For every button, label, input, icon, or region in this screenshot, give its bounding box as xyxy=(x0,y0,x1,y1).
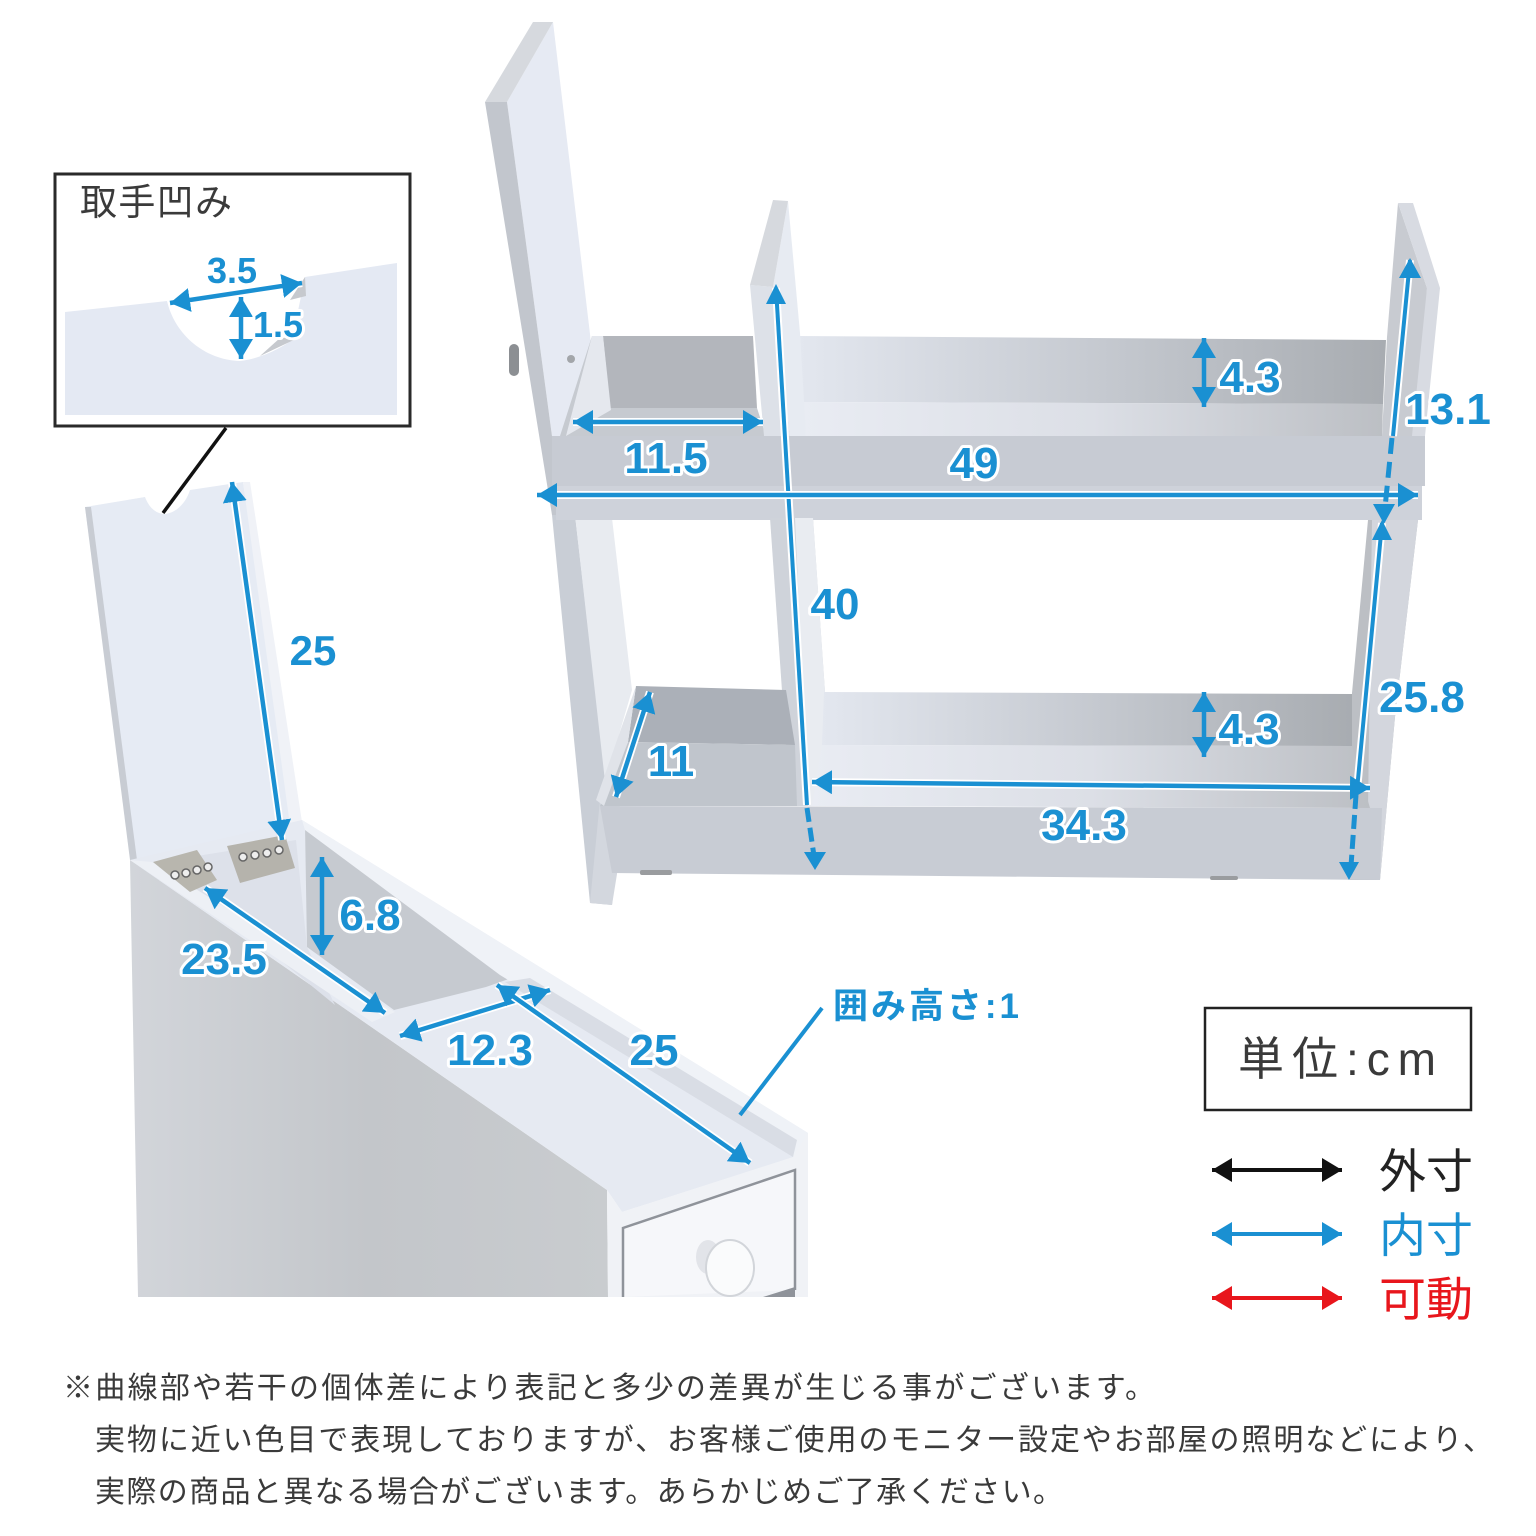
footnote: ※曲線部や若干の個体差により表記と多少の差異が生じる事がございます。 xyxy=(63,1372,1155,1405)
dimension top 25 xyxy=(497,985,750,1163)
dimension lower 4.3: 4.3 xyxy=(1218,705,1280,754)
panel: cabinet with open lid xyxy=(85,428,1019,1297)
footnote: 実物に近い色目で表現しておりますが、お客様ご使用のモニター設定やお部屋の照明などにより、 xyxy=(95,1424,1493,1457)
lid notch shape xyxy=(65,263,397,415)
back board xyxy=(485,22,632,905)
dimension upper 4.3 xyxy=(1204,338,1281,407)
dimension 25.8 xyxy=(1339,520,1465,880)
upper shelf xyxy=(552,336,1425,520)
lid xyxy=(85,482,305,880)
legend: outer size: 外寸 xyxy=(1379,1145,1473,1198)
casters xyxy=(640,870,1238,880)
leader from inset to notch xyxy=(163,428,226,513)
cabinet front with drawer xyxy=(607,1133,808,1297)
dimension upper 4.3: 4.3 xyxy=(1219,353,1281,402)
dimension 3.5 xyxy=(170,250,302,303)
hinges xyxy=(153,835,295,892)
dimension lower 4.3 xyxy=(1204,692,1280,757)
legend xyxy=(1212,1145,1473,1326)
dimension 11: 11 xyxy=(648,737,694,786)
dimension 49: 49 xyxy=(950,439,998,488)
screw xyxy=(567,355,575,363)
inset frame xyxy=(55,174,410,426)
right post xyxy=(1350,203,1440,880)
panel: inset handle notch xyxy=(55,174,410,426)
dimension 40 xyxy=(766,284,859,870)
footnote: 実際の商品と異なる場合がございます。あらかじめご了承ください。 xyxy=(95,1476,1063,1509)
dimension lid 25 xyxy=(232,482,336,840)
legend: adjustable: 可動 xyxy=(1379,1273,1473,1326)
footnote xyxy=(63,1372,1493,1509)
panel: open shelf unit xyxy=(485,22,1440,905)
inset heading: 取手凹み xyxy=(80,182,232,223)
dimension 25.8: 25.8 xyxy=(1379,673,1465,722)
handle knob behind board xyxy=(509,344,519,376)
callout: rim height: 囲み高さ:1 xyxy=(833,987,1019,1026)
dimension 3.5: 3.5 xyxy=(207,250,257,291)
drawer knob xyxy=(696,1240,754,1296)
dimension 13.1 xyxy=(1373,258,1491,524)
dimension 34.3 xyxy=(812,782,1370,850)
dimension 12.3: 12.3 xyxy=(447,1026,533,1075)
dimension 6.8: 6.8 xyxy=(339,891,401,940)
dimension 6.8 xyxy=(322,857,401,955)
dimension 11 xyxy=(616,692,694,797)
dimension 34.3: 34.3 xyxy=(1041,801,1127,850)
compartment xyxy=(130,820,808,1212)
dimension 23.5: 23.5 xyxy=(181,935,267,984)
middle divider xyxy=(750,200,832,806)
dimension 12.3 xyxy=(400,990,550,1075)
dimension 1.5 xyxy=(241,297,303,359)
callout: rim height xyxy=(740,987,1019,1115)
dimension top 25: 25 xyxy=(630,1026,678,1075)
unit box xyxy=(1205,1008,1471,1110)
dimension lid 25: 25 xyxy=(290,627,336,674)
dimension 13.1: 13.1 xyxy=(1405,385,1491,434)
dimension 11.5: 11.5 xyxy=(624,434,708,483)
dimension 1.5: 1.5 xyxy=(253,304,303,345)
dimension 23.5 xyxy=(181,888,385,1013)
dimension 40: 40 xyxy=(811,580,859,629)
lower shelf xyxy=(596,686,1382,880)
cabinet side xyxy=(130,860,608,1297)
legend: inner size: 内寸 xyxy=(1379,1209,1473,1262)
unit box: 単位:cm xyxy=(1238,1033,1436,1085)
